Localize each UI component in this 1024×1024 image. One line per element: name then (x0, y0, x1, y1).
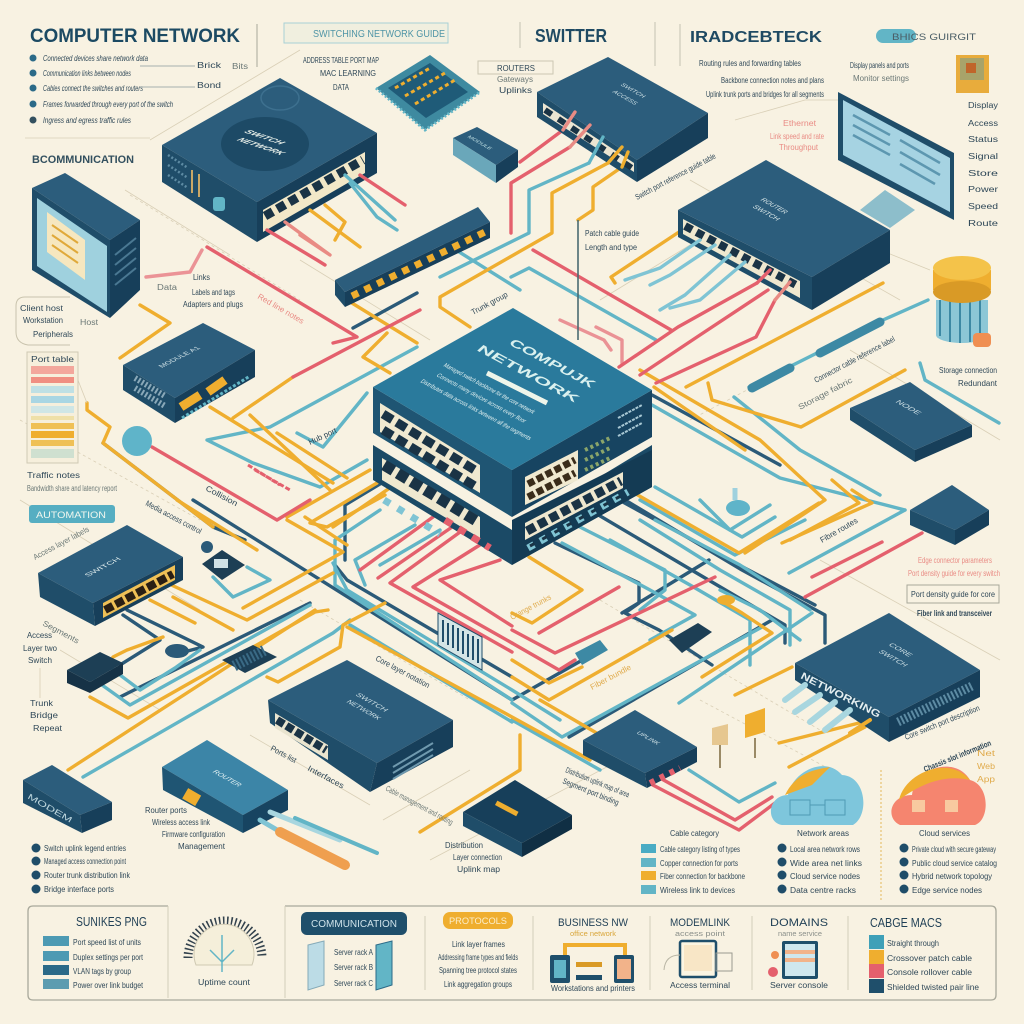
device: bottom switch (463, 780, 572, 857)
small text clusters: Repeat (33, 724, 63, 733)
orange cables (68, 163, 905, 832)
title: COMPUTER NETWORK (30, 26, 240, 47)
pale red routes (146, 250, 622, 363)
panel: cable types: Crossover patch cable (887, 954, 973, 963)
small text clusters: Patch cable guide (585, 229, 639, 238)
small text clusters (16, 56, 1000, 874)
small text clusters: Gateways (497, 75, 533, 84)
legend lower-centre-right: Data centre racks (790, 886, 856, 895)
small text clusters: Display panels and ports (850, 61, 909, 70)
device: teal router: ROUTER (210, 769, 244, 788)
slanted annotation labels (32, 151, 993, 827)
intro list: Brick (197, 61, 222, 70)
slanted annotation labels: Collision (204, 484, 239, 508)
small text clusters: Traffic notes (27, 471, 80, 480)
slanted annotation labels: Media access control (144, 499, 203, 536)
device: small switch right (850, 382, 972, 462)
device: bottom-left module (23, 765, 112, 833)
intro list: Communication links between nodes (43, 69, 131, 78)
device: long bar switch (335, 207, 490, 307)
small text clusters: MAC LEARNING (320, 69, 376, 78)
info table left (27, 352, 78, 463)
small text clusters: Trunk (30, 699, 54, 708)
panel: devices: Server rack A (334, 948, 374, 957)
legend lower-left: Bridge interface ports (44, 885, 114, 894)
slanted annotation labels: Switch port reference guide table (634, 151, 718, 202)
legend lower-right: Hybrid network topology (912, 872, 992, 881)
device: right large switch (785, 613, 980, 742)
intro list: Frames forwarded through every port of the switch (43, 100, 173, 109)
small text clusters: Routing rules and forwarding tables (699, 59, 801, 68)
legend lower-left: Router trunk distribution link (44, 871, 131, 880)
connector blocks (67, 541, 277, 693)
legend lower-left: Managed access connection point (44, 857, 127, 866)
panel: cable types: Console rollover cable (887, 968, 973, 977)
sub-heading pill left (29, 505, 115, 523)
device: right large switch: CORE (886, 642, 915, 658)
small text clusters: Adapters and plugs (183, 300, 243, 309)
device: top-left switch: SWITCH (240, 129, 288, 146)
slanted annotation labels: Interfaces (306, 764, 346, 791)
legend lower-centre-right: Cloud service nodes (790, 872, 860, 881)
device: small switch left (123, 323, 255, 423)
top banner label: SWITCHING NETWORK GUIDE (313, 29, 445, 40)
panel: radial gauge: Uptime count (198, 978, 251, 987)
panel: connected devices: Workstations and printers (551, 984, 635, 993)
cable plugs (384, 492, 628, 548)
intro list: Bits (232, 62, 248, 71)
small text clusters: ROUTERS (497, 64, 535, 73)
panel: monitor: name service (778, 931, 822, 938)
small text clusters: Length and type (585, 243, 637, 252)
panel: cable types (869, 915, 980, 993)
cable network (68, 130, 999, 832)
icon: teal blob (726, 488, 750, 516)
red cables (152, 130, 922, 830)
upper unit: Connects many devices across every floor (435, 372, 529, 424)
small text clusters: Edge connector parameters (918, 556, 992, 565)
device: right switch: SWITCH (750, 204, 782, 222)
small text clusters: Port density guide for core (911, 590, 995, 599)
small text clusters: Uplinks (499, 86, 532, 95)
panel: summary list: Duplex settings per port (73, 953, 144, 962)
legend lower-middle: Cable category listing of types (660, 845, 740, 854)
device: lower switch (583, 710, 697, 788)
device: top switch: ACCESS (610, 90, 638, 106)
small text clusters: Signal (968, 152, 998, 161)
panel: monitor: DOMAINS (770, 917, 828, 929)
panel: orange notes: Spanning tree protocol states (439, 966, 517, 975)
legend lower-middle: Fiber connection for backbone (660, 872, 745, 881)
small text clusters: DATA (333, 83, 350, 92)
red cloud (891, 767, 986, 825)
small pins (712, 708, 765, 768)
device: monitor left (32, 173, 140, 318)
device: small switch edge (910, 485, 989, 545)
intro list: Ingress and egress traffic rules (43, 116, 131, 125)
slanted annotation labels: Trunk group (470, 290, 510, 317)
small text clusters: Wireless access link (152, 818, 211, 827)
upper unit: Distributes data across links between all the segments (419, 378, 534, 442)
barcode label (438, 613, 482, 670)
legend lower-right: Public cloud service catalog (912, 859, 997, 868)
panel: cable types: Shielded twisted pair line (887, 983, 980, 992)
slanted annotation labels: Chassis slot information (922, 739, 993, 774)
slanted annotation labels: Segment port binding (561, 777, 620, 807)
small text clusters: Access (968, 119, 998, 128)
small text clusters: Management (178, 842, 226, 851)
panel: summary list: SUNIKES PNG (76, 914, 147, 929)
small text clusters: Access (27, 631, 52, 640)
top banner label (284, 23, 448, 43)
device: teal router (162, 740, 377, 865)
small text clusters: Peripherals (33, 330, 73, 339)
legend lower-left (32, 844, 131, 894)
small text clusters: Host (80, 318, 99, 327)
panel: devices: COMMUNICATION (311, 919, 397, 930)
panel: devices: Server rack B (334, 963, 373, 972)
small text clusters: Bandwidth share and latency report (27, 484, 118, 493)
slanted annotation labels: Storage fabric (797, 376, 854, 412)
slanted annotation labels: Segments (41, 619, 81, 646)
device: small module top (453, 127, 518, 183)
icon: chip card (956, 55, 989, 93)
intro list (30, 54, 248, 125)
legend lower-centre-right: Wide area net links (790, 859, 862, 868)
small text clusters: Power (968, 185, 998, 194)
small text clusters: Cable category (670, 829, 719, 838)
small text clusters: Layer two (23, 644, 58, 653)
device: circuit board (376, 55, 480, 130)
slanted annotation labels: Fibre routes (818, 516, 859, 545)
slanted annotation labels: Access layer labels (32, 525, 91, 562)
small text clusters: ADDRESS TABLE PORT MAP (303, 56, 379, 65)
device: bottom-left module: MODEM (26, 792, 74, 825)
small text clusters: Web (977, 762, 996, 771)
small text clusters: Store (968, 169, 999, 178)
small text clusters: Speed (968, 202, 998, 211)
heading: switter: SWITTER (535, 26, 607, 46)
device: bottom-centre switch (268, 660, 453, 792)
panel: devices (301, 912, 407, 990)
upper unit: COMPUJK (506, 337, 599, 390)
device: central stacked switch (373, 308, 652, 565)
small text clusters: Backbone connection notes and plans (721, 76, 824, 85)
small text clusters: Display (968, 101, 998, 110)
device: small module top: MODULE (465, 135, 494, 151)
device: right large switch: SWITCH (876, 649, 910, 668)
panel: orange notes: Link aggregation groups (444, 980, 512, 989)
slanted annotation labels: Red line notes (256, 292, 306, 326)
device: database stack (933, 256, 991, 347)
panel: summary list: Power over link budget (73, 981, 144, 990)
small text clusters: Net (977, 749, 996, 758)
bottom reference panel (28, 906, 996, 1000)
small text clusters: Storage connection (939, 366, 997, 375)
device: right large switch: NETWORKING (799, 671, 882, 721)
device: left switch: SWITCH (84, 557, 123, 578)
device: small switch left: MODULE A1 (158, 346, 203, 369)
small text clusters: Labels and tags (192, 288, 235, 297)
small text clusters: Ethernet (783, 119, 817, 128)
panel: cable types: CABGE MACS (870, 915, 942, 930)
panel: workstation: MODEMLINK (670, 917, 731, 929)
intro list: Bond (197, 81, 221, 90)
small text clusters: Uplink trunk ports and bridges for all segments (706, 90, 824, 99)
upper unit (373, 308, 652, 517)
small text clusters: Route (968, 219, 999, 228)
legend lower-middle (641, 844, 745, 895)
panel: summary list (43, 914, 147, 990)
device: right switch: ROUTER (758, 197, 790, 215)
small text clusters: Monitor settings (853, 74, 909, 83)
small text clusters: Redundant (958, 379, 998, 388)
small text clusters: Firmware configuration (162, 830, 225, 839)
panel: workstation: Access terminal (670, 981, 730, 990)
panel: orange notes (438, 912, 518, 989)
panel: connected devices (550, 917, 635, 993)
small text clusters: Workstation (23, 316, 63, 325)
panel: workstation (664, 917, 732, 990)
small text clusters: Network areas (797, 829, 849, 838)
small text clusters: Bridge (30, 711, 59, 720)
legend lower-left: Switch uplink legend entries (44, 844, 126, 853)
teal cables (83, 163, 999, 802)
small text clusters: Router ports (145, 806, 187, 815)
legend lower-centre-right (778, 844, 862, 895)
small text clusters: Layer connection (453, 853, 502, 862)
panel: summary list: Port speed list of units (73, 938, 141, 947)
panel: orange notes: PROTOCOLS (449, 916, 507, 926)
small text clusters: Cloud services (919, 829, 970, 838)
upper unit: Managed switch backbone for the core network (442, 362, 538, 415)
device: bottom-centre switch: NETWORK (344, 699, 383, 721)
device: monitor top right (838, 92, 954, 228)
slanted annotation labels: Fiber bundle (589, 662, 633, 692)
small text clusters: Link speed and rate (770, 132, 824, 141)
legend label top right: BHICS GUIRGIT (892, 32, 977, 42)
connector cable (752, 322, 880, 388)
slanted annotation labels: Orange trunks (509, 593, 553, 622)
info table left: Port table (31, 355, 75, 364)
panel: connected devices: office network (570, 931, 617, 938)
slanted annotation labels: Core layer notation (374, 654, 431, 690)
navy cables (103, 293, 825, 737)
legend label top right (876, 29, 977, 43)
panel: connected devices: BUSINESS NW (558, 917, 629, 929)
lower unit (373, 445, 652, 565)
small text clusters: Uplink map (457, 865, 501, 874)
intro list: Connected devices share network data (43, 54, 148, 63)
device: bottom-centre switch: SWITCH (353, 692, 390, 713)
panel: radial gauge (188, 921, 262, 987)
device: left switch (38, 525, 183, 626)
slanted annotation labels: Ports list (269, 744, 299, 765)
slanted annotation labels: Core switch port description (903, 704, 981, 742)
legend lower-right: Edge service nodes (912, 886, 982, 895)
panel: orange notes: Link layer frames (452, 940, 505, 949)
small text clusters: Links (193, 273, 210, 282)
slanted annotation labels: Hub port (307, 426, 339, 447)
small text clusters: Client host (20, 304, 64, 313)
small text clusters: Status (968, 135, 998, 144)
blue cloud (771, 766, 863, 825)
panel: monitor: Server console (770, 981, 829, 990)
sub-heading pill left: AUTOMATION (36, 510, 106, 520)
device: top switch: SWITCH (618, 83, 646, 99)
slanted annotation labels: Distribution uplink map of area (564, 766, 631, 799)
panel: summary list: VLAN tags by group (73, 967, 131, 976)
heading: iradcebteck: IRADCEBTECK (690, 29, 822, 46)
intro list: Cables connect the switches and routers (43, 84, 143, 93)
small text clusters: Data (157, 283, 178, 292)
device: top-left switch: NETWORK (233, 137, 288, 156)
legend lower-middle: Copper connection for ports (660, 859, 738, 868)
red connector group (248, 465, 290, 490)
small text clusters: App (977, 775, 996, 784)
slanted annotation labels: Connector cable reference label (813, 334, 897, 385)
panel: cable types: Straight through (887, 939, 939, 948)
small text clusters: Throughput (779, 143, 819, 152)
device: top-left switch (162, 78, 405, 265)
small plug blocks (575, 595, 735, 665)
slanted annotation labels: Cable management and routing (384, 784, 455, 827)
device: lower switch: UPLINK (634, 731, 661, 746)
device: small switch right: NODE (893, 399, 923, 416)
small text clusters: Fiber link and transceiver (917, 609, 992, 618)
panel: workstation: access point (675, 931, 725, 938)
upper unit: NETWORK (474, 343, 583, 405)
small text clusters: Distribution (445, 841, 483, 850)
panel: devices: Server rack C (334, 979, 373, 988)
small text clusters: Switch (28, 656, 52, 665)
legend lower-right (900, 844, 997, 895)
device: right switch (625, 160, 890, 310)
legend lower-centre-right: Local area network rows (790, 845, 860, 854)
panel: orange notes: Addressing frame types and fields (438, 953, 518, 962)
icon: blue node (122, 426, 152, 456)
panel: monitor (768, 917, 829, 990)
device: top switch (537, 57, 708, 182)
section heading: communication: BCOMMUNICATION (32, 154, 134, 166)
legend lower-middle: Wireless link to devices (660, 886, 735, 895)
